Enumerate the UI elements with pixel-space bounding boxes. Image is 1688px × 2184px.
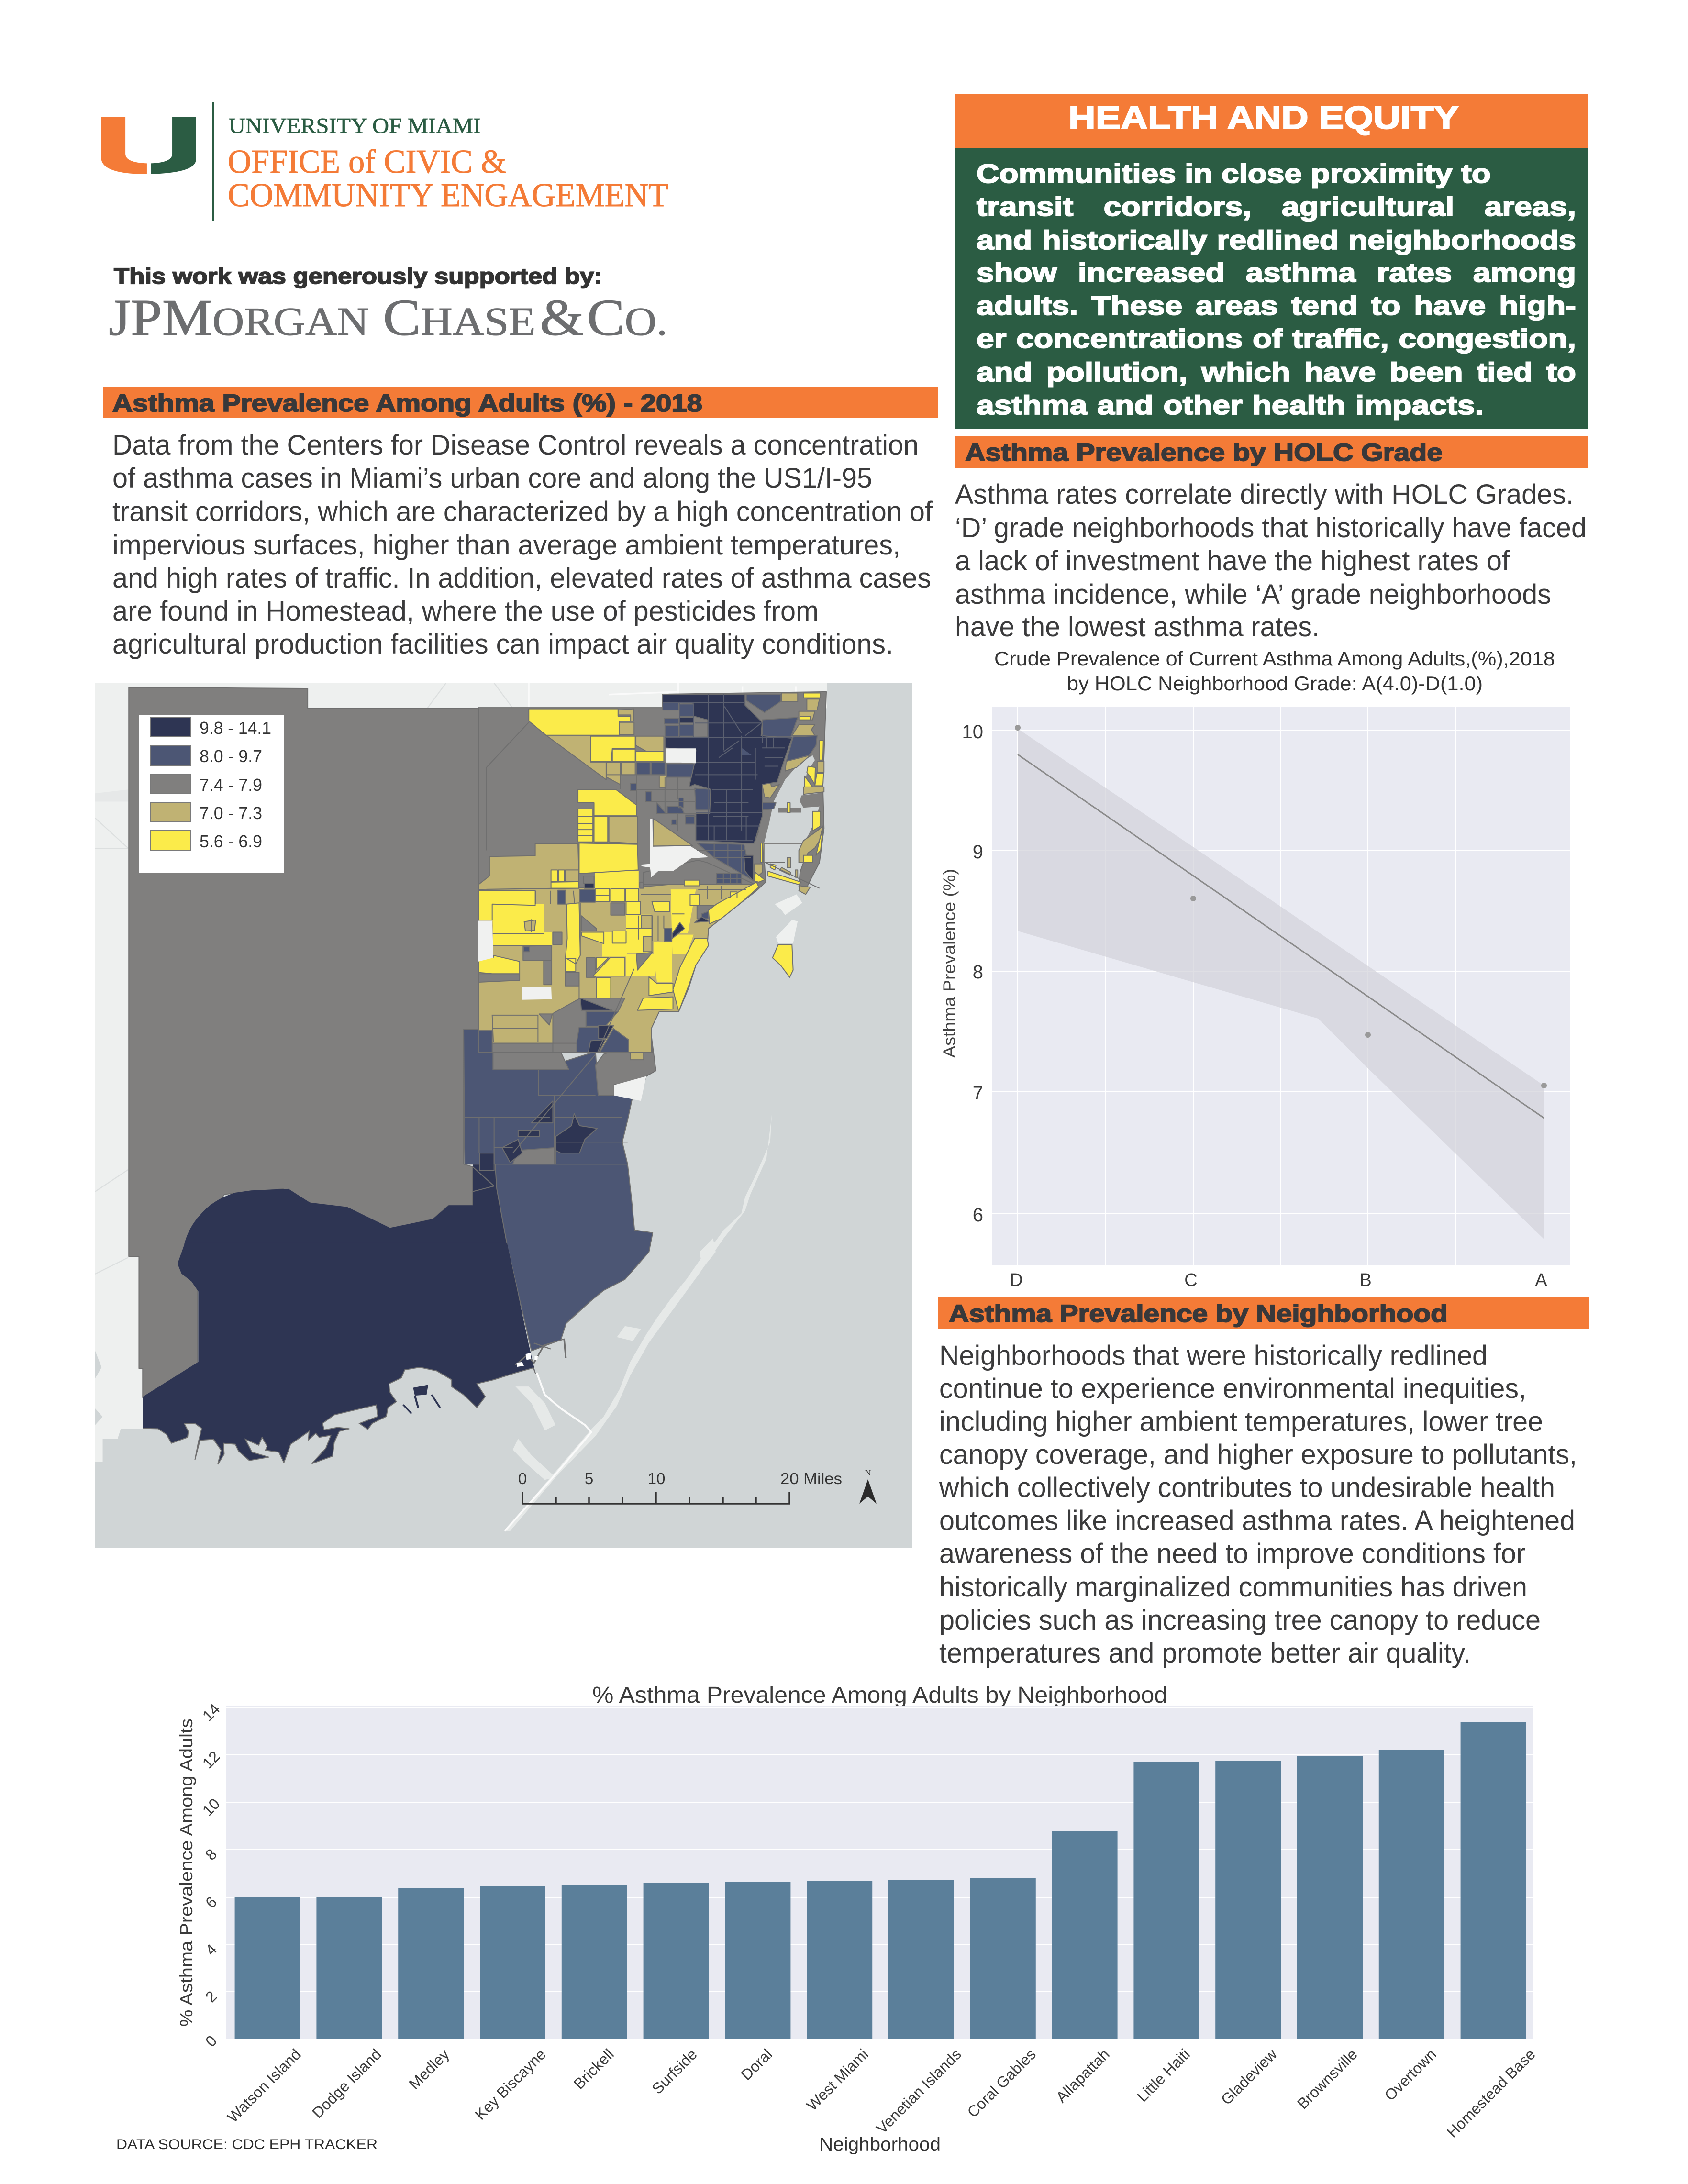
text block: neighborhood explanation: which collectively contributes to undesirable health xyxy=(939,1472,1555,1503)
text block: CDC data description: Data from the Centers for Disease Control reveals a concentration xyxy=(112,430,919,461)
logo: University of Miami Office of Civic and Community Engagement: UNIVERSITY OF MIAMI xyxy=(229,113,481,138)
panel: Health and Equity summary xyxy=(955,148,1588,429)
grey patches xyxy=(478,860,755,1053)
logo: University of Miami Office of Civic and Community Engagement: OFFICE of CIVIC & xyxy=(228,144,506,180)
text block: CDC data description xyxy=(112,430,933,660)
sponsor wordmark: JPMorgan Chase &amp; Co.: JPMORGAN CHASE &CO. xyxy=(109,289,667,346)
x axis tick labels xyxy=(224,2045,1539,2141)
south Dade tracts xyxy=(464,1030,633,1164)
legend: 8.0 - 9.7 xyxy=(200,746,262,766)
y axis title: % Asthma Prevalence Among Adults xyxy=(177,1718,196,2027)
text block: HOLC grade explanation: a lack of investment have the highest rates of xyxy=(955,545,1510,576)
panel: Health and Equity summary: asthma and other health impacts. xyxy=(977,390,1484,420)
legend: 5.6 - 6.9 xyxy=(200,831,262,851)
text block: neighborhood explanation: historically marginalized communities has driven xyxy=(939,1572,1527,1603)
text block: neighborhood explanation: temperatures and promote better air quality. xyxy=(939,1638,1471,1669)
text block: neighborhood explanation xyxy=(939,1340,1577,1669)
chart: regression of asthma prevalence by HOLC grade xyxy=(940,647,1570,1290)
y axis labels: 9 xyxy=(973,842,983,863)
y axis tick labels: 4 xyxy=(202,1940,220,1959)
y axis labels: 6 xyxy=(973,1205,983,1226)
panel: Health and Equity summary: show increased asthma rates among xyxy=(977,257,1576,288)
x axis tick labels: Coral Gables xyxy=(964,2045,1039,2121)
text block: neighborhood explanation: canopy coverage, and higher exposure to pollutants, xyxy=(939,1439,1577,1470)
y axis tick labels: 8 xyxy=(202,1845,220,1863)
scale bar: 20 Miles xyxy=(780,1470,842,1487)
text block: neighborhood explanation: including higher ambient temperatures, lower tree xyxy=(939,1406,1543,1437)
y axis tick labels xyxy=(199,1700,223,2050)
y axis tick labels: 2 xyxy=(202,1987,220,2006)
yellow class xyxy=(478,693,823,1011)
y axis labels xyxy=(940,721,983,1226)
navy tract and Florida Bay coast xyxy=(143,1243,566,1464)
navy class xyxy=(580,694,792,1053)
y axis labels: 7 xyxy=(973,1083,983,1104)
scale bar: 5 xyxy=(585,1470,593,1487)
legend: 7.0 - 7.3 xyxy=(200,803,262,823)
sponsor line: This work was generously supported by: xyxy=(114,264,602,288)
panel: neighborhood heading: Asthma Prevalence by Neighborhood xyxy=(949,1300,1448,1327)
chart title xyxy=(994,647,1555,695)
x axis tick labels: Watson Island xyxy=(224,2045,304,2126)
panel: asthma prevalence among adults heading xyxy=(103,387,938,418)
text block: neighborhood explanation: policies such as increasing tree canopy to reduce xyxy=(939,1605,1541,1636)
navy tract north xyxy=(184,1164,506,1244)
text block: neighborhood explanation: outcomes like increased asthma rates. A heightened xyxy=(939,1505,1575,1536)
y axis labels: 10 xyxy=(962,721,983,743)
y axis tick labels: 0 xyxy=(202,2032,220,2050)
x axis tick labels: Brickell xyxy=(570,2045,617,2093)
y axis labels: Asthma Prevalence (%) xyxy=(940,869,959,1058)
text block: neighborhood explanation: Neighborhoods that were historically redlined xyxy=(939,1340,1488,1371)
data points xyxy=(1015,725,1547,1088)
yellow base fills xyxy=(492,871,696,982)
x axis labels: D xyxy=(1010,1270,1023,1290)
icon: north arrow: N xyxy=(865,1468,871,1477)
x axis tick labels: Dodge Island xyxy=(309,2045,385,2121)
x axis tick labels: Overtown xyxy=(1381,2045,1440,2104)
panel: neighborhood heading xyxy=(938,1297,1589,1329)
panel: Health and Equity summary: adults. These areas tend to have high- xyxy=(977,290,1576,321)
y axis tick labels: 10 xyxy=(199,1795,223,1819)
text block: CDC data description: are found in Homestead, where the use of pesticides from xyxy=(112,596,819,627)
panel: Health and Equity summary: and historically redlined neighborhoods xyxy=(977,225,1576,255)
khaki class xyxy=(478,693,824,1053)
x axis tick labels: Gladeview xyxy=(1218,2045,1281,2108)
x axis tick labels: Little Haiti xyxy=(1133,2045,1193,2105)
chart title: by HOLC Neighborhood Grade: A(4.0)-D(1.0) xyxy=(1067,672,1483,695)
text block: HOLC grade explanation: Asthma rates correlate directly with HOLC Grades. xyxy=(955,479,1574,510)
scale bar: 0 xyxy=(518,1470,527,1487)
y axis labels: 8 xyxy=(973,962,983,983)
x axis tick labels: Doral xyxy=(737,2045,776,2084)
legend xyxy=(139,715,284,873)
map: asthma prevalence choropleth of Miami-Dade xyxy=(95,683,912,1548)
y axis tick labels: 6 xyxy=(202,1893,220,1911)
unclassified white tracts xyxy=(478,748,709,1000)
logo: University of Miami Office of Civic and Community Engagement: COMMUNITY ENGAGEMENT xyxy=(228,177,668,214)
text block: CDC data description: and high rates of traffic. In addition, elevated rates of asthma cases xyxy=(112,563,931,594)
x axis labels: A xyxy=(1535,1270,1547,1290)
text block: HOLC grade explanation: asthma incidence, while ‘A’ grade neighborhoods xyxy=(955,579,1551,610)
x axis tick labels: Surfside xyxy=(648,2045,700,2097)
legend: 7.4 - 7.9 xyxy=(200,775,262,795)
x axis labels xyxy=(1010,1270,1547,1290)
x axis tick labels: Homestead Base xyxy=(1444,2045,1539,2141)
chart title: Crude Prevalence of Current Asthma Among Adults,(%),2018 xyxy=(994,647,1555,670)
panel: Health and Equity summary: and pollution, which have been tied to xyxy=(977,357,1576,387)
confidence band xyxy=(1018,729,1544,1239)
text block: CDC data description: impervious surfaces, higher than average ambient temperatures, xyxy=(112,530,900,561)
Florida Keys xyxy=(505,1115,772,1531)
text block: CDC data description: of asthma cases in Miami’s urban core and along the US1/I-95 xyxy=(112,463,872,494)
text block: neighborhood explanation: awareness of the need to improve conditions for xyxy=(939,1538,1525,1569)
urban tracts xyxy=(478,692,826,1053)
land: surrounding basemap xyxy=(95,683,827,1462)
x axis tick labels: Key Biscayne xyxy=(471,2045,549,2123)
panel: HOLC grade heading xyxy=(955,436,1588,468)
x axis tick labels: West Miami xyxy=(803,2045,872,2114)
icon: north arrow xyxy=(859,1468,877,1504)
y axis tick labels: 14 xyxy=(199,1700,223,1724)
panel: Health and Equity heading: HEALTH AND EQUITY xyxy=(1068,100,1459,136)
chart title: % Asthma Prevalence Among Adults by Neighborhood xyxy=(592,1683,1167,1708)
x axis labels: C xyxy=(1184,1270,1198,1290)
text block: HOLC grade explanation: have the lowest asthma rates. xyxy=(955,611,1320,643)
tract boundaries xyxy=(663,694,792,841)
data source note: DATA SOURCE: CDC EPH TRACKER xyxy=(116,2137,378,2152)
indigo class xyxy=(478,694,817,1053)
x axis tick labels: Brownsville xyxy=(1294,2045,1361,2112)
regression line xyxy=(1018,754,1544,1118)
panel: Health and Equity summary: transit corridors, agricultural areas, xyxy=(977,191,1576,222)
x axis tick labels: Venetian Islands xyxy=(873,2045,965,2137)
Everglades tract, grey class xyxy=(128,687,478,1398)
x axis title: Neighborhood xyxy=(819,2134,941,2155)
text block: neighborhood explanation: continue to experience environmental inequities, xyxy=(939,1373,1526,1404)
bars xyxy=(235,1722,1526,2039)
y axis tick labels: 12 xyxy=(199,1748,223,1772)
x axis labels: B xyxy=(1359,1270,1372,1290)
text block: HOLC grade explanation xyxy=(955,479,1587,643)
chart: asthma prevalence by neighborhood bars xyxy=(177,1683,1539,2155)
text block: CDC data description: transit corridors, which are characterized by a high concentration of xyxy=(112,496,933,527)
panel: Health and Equity heading xyxy=(955,94,1588,148)
x axis tick labels: Allapattah xyxy=(1053,2045,1113,2106)
panel: HOLC grade heading: Asthma Prevalence by HOLC Grade xyxy=(965,439,1443,466)
panel: Health and Equity summary: Communities in close proximity to xyxy=(977,158,1491,188)
logo: University of Miami Office of Civic and Community Engagement xyxy=(101,102,668,221)
x axis tick labels: Medley xyxy=(406,2045,453,2093)
text block: HOLC grade explanation: ‘D’ grade neighborhoods that historically have faced xyxy=(955,512,1587,543)
panel: asthma prevalence among adults heading: Asthma Prevalence Among Adults (%) - 2018 xyxy=(112,389,702,417)
scale bar: 10 xyxy=(648,1470,665,1487)
slate tract south Biscayne xyxy=(495,1164,653,1351)
legend: 9.8 - 14.1 xyxy=(200,718,271,738)
icon: split U mark xyxy=(101,117,196,174)
panel: Health and Equity summary: er concentrations of traffic, congestion, xyxy=(977,323,1576,354)
scale bar xyxy=(518,1470,842,1504)
text block: CDC data description: agricultural production facilities can impact air quality conditions. xyxy=(112,629,893,660)
